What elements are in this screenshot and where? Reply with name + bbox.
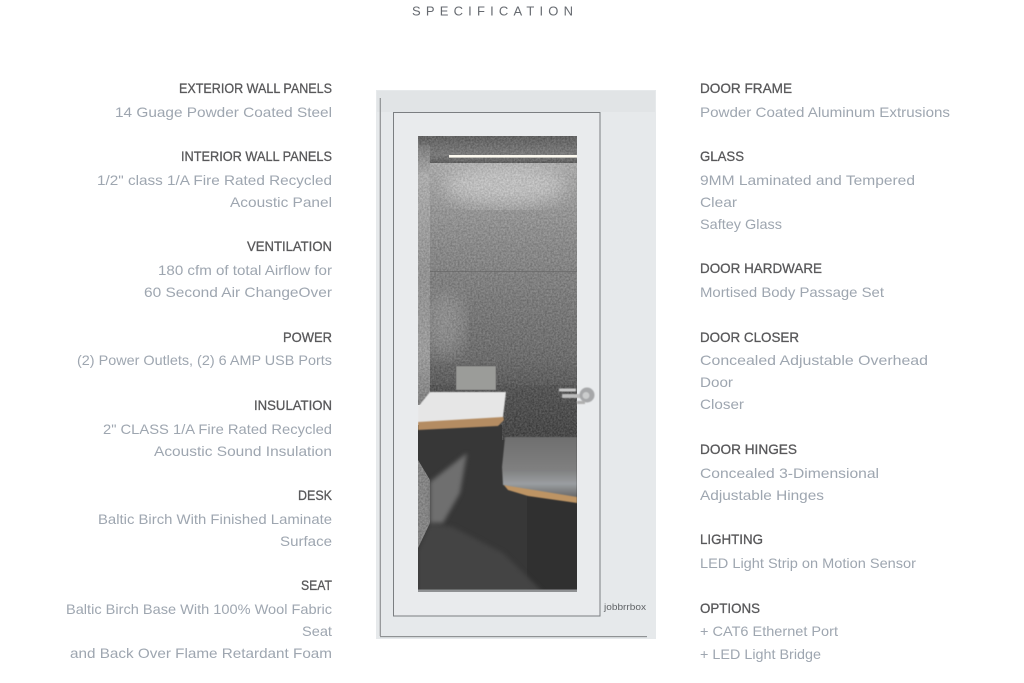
- spec: door frame: Powder Coated Aluminum Extrusions: [700, 104, 950, 120]
- spec: exterior wall panels: 14 Guage Powder Coated Steel: [115, 104, 332, 120]
- title: SPECIFICATION: [412, 4, 573, 18]
- spec: insulation: 2" CLASS 1/A Fire Rated Recycled: [103, 421, 332, 437]
- spec: glass: [700, 148, 915, 232]
- spec: ventilation: 180 cfm of total Airflow for: [158, 262, 332, 278]
- spec: insulation: Acoustic Sound Insulation: [154, 443, 332, 459]
- spec: exterior wall panels: [115, 80, 332, 120]
- back wall felt: [430, 163, 577, 385]
- spec: door hinges: Concealed 3-Dimensional: [700, 465, 879, 481]
- spec: door hinges: [700, 441, 879, 503]
- spec: ventilation: [144, 238, 332, 300]
- logo: jobbrrbox: [603, 602, 647, 612]
- spec: desk: [98, 487, 333, 549]
- spec: seat: [66, 577, 332, 661]
- spec: interior wall panels: 1/2" class 1/A Fire Rated Recycled: [97, 172, 332, 188]
- panel: right specifications: [700, 80, 950, 662]
- door window interior: [418, 136, 577, 592]
- spec: door hinges: DOOR HINGES: [700, 441, 797, 457]
- window bottom edge: [418, 590, 577, 592]
- spec: door hinges: Adjustable Hinges: [700, 487, 824, 503]
- spec: ventilation: 60 Second Air ChangeOver: [144, 284, 332, 300]
- spec: glass: GLASS: [700, 148, 744, 164]
- spec: door frame: [700, 80, 950, 120]
- spec: lighting: [700, 531, 916, 571]
- wall seams: [430, 271, 577, 272]
- spec: seat: SEAT: [301, 577, 332, 593]
- spec: glass: 9MM Laminated and Tempered: [700, 172, 915, 188]
- spec: power: [77, 329, 332, 368]
- left side wall: [418, 145, 430, 405]
- spec: desk: Surface: [280, 533, 332, 549]
- booth exterior panel: [376, 90, 656, 639]
- door frame: [394, 112, 600, 616]
- spec: ventilation: VENTILATION: [247, 238, 332, 254]
- lower dark wall felt: [498, 398, 577, 440]
- spec: insulation: [103, 397, 332, 459]
- spec: lighting: LED Light Strip on Motion Sensor: [700, 555, 916, 571]
- spec: door frame: DOOR FRAME: [700, 80, 792, 96]
- wall control plate: [456, 366, 496, 390]
- spec: options: [700, 600, 838, 662]
- spec: door closer: Door: [700, 374, 733, 390]
- spec: glass: Saftey Glass: [700, 216, 782, 232]
- light patch on wall: [430, 453, 467, 523]
- spec: power: POWER: [283, 329, 332, 345]
- illustration: booth door photo: [376, 90, 656, 639]
- seat: [502, 437, 577, 503]
- spec: desk: DESK: [298, 487, 333, 503]
- spec: door hardware: [700, 260, 884, 300]
- spec: options: + CAT6 Ethernet Port: [700, 623, 838, 639]
- spec: door closer: Concealed Adjustable Overhead: [700, 352, 928, 368]
- spec: interior wall panels: Acoustic Panel: [230, 194, 332, 210]
- side wall lower patch: [418, 460, 430, 548]
- spec: exterior wall panels: EXTERIOR WALL PANELS: [179, 80, 332, 96]
- spec: door closer: [700, 329, 928, 412]
- spec: door hardware: Mortised Body Passage Set: [700, 284, 884, 300]
- spec: interior wall panels: [97, 148, 332, 210]
- panel: left specifications: [66, 80, 333, 661]
- spec: power: (2) Power Outlets, (2) 6 AMP USB Ports: [77, 352, 332, 368]
- spec: door hardware: DOOR HARDWARE: [700, 260, 822, 276]
- spec: glass: Clear: [700, 194, 737, 210]
- spec: options: OPTIONS: [700, 600, 760, 616]
- spec: seat: Seat: [302, 623, 332, 639]
- spec: desk: Baltic Birch With Finished Laminate: [98, 511, 332, 527]
- spec: door closer: DOOR CLOSER: [700, 329, 799, 345]
- spec: seat: Baltic Birch Base With 100% Wool Fabric: [66, 601, 332, 617]
- door handle: [559, 388, 594, 404]
- spec: options: + LED Light Bridge: [700, 646, 821, 662]
- spec: door closer: Closer: [700, 396, 744, 412]
- ceiling: [418, 136, 577, 163]
- spec: insulation: INSULATION: [254, 397, 332, 413]
- spec: seat: and Back Over Flame Retardant Foam: [70, 645, 332, 661]
- spec: lighting: LIGHTING: [700, 531, 763, 547]
- spec: interior wall panels: INTERIOR WALL PANELS: [181, 148, 332, 164]
- lower dark wall and floor: [418, 425, 502, 592]
- desk: [418, 392, 506, 430]
- light strip: [449, 155, 577, 158]
